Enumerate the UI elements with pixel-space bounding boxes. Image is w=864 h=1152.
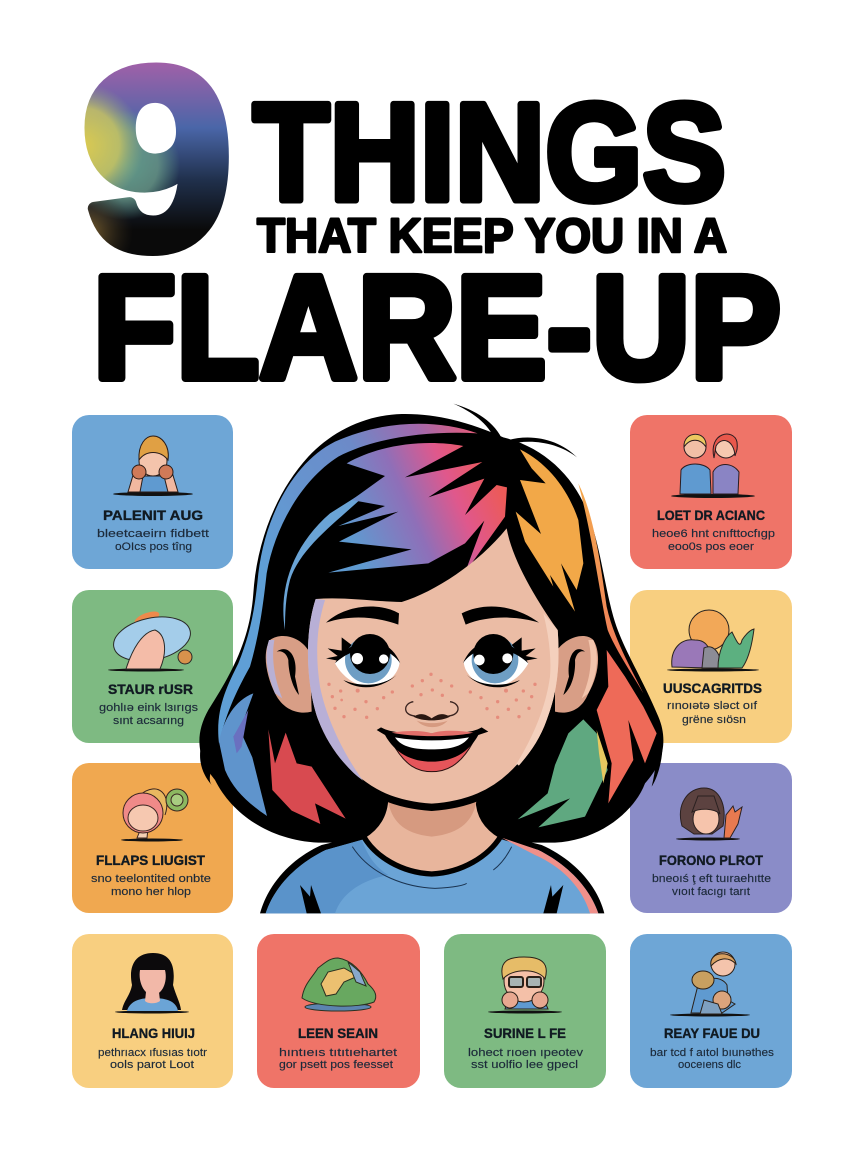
heading line: FLARE-UP: FLARE-UP — [93, 246, 781, 410]
card description: gor psett pos feesset — [279, 1059, 393, 1071]
panel: uuscagritds — [630, 590, 792, 743]
icon: girl with black hair — [115, 953, 189, 1014]
card title: LOET DR ACIANC — [657, 507, 765, 523]
heading line: THAT KEEP YOU IN A: THAT KEEP YOU IN A — [257, 210, 727, 263]
card title: STAUR rUSR — [108, 681, 193, 697]
icon: two children — [671, 434, 755, 498]
right outer hair strand — [578, 483, 643, 693]
icon: person with glasses — [488, 957, 562, 1014]
panel: reay faue du — [630, 934, 792, 1088]
card title: REAY FAUE DU — [664, 1025, 760, 1041]
card description: oOIcs pos tîng — [115, 541, 192, 553]
panel: forono plrot — [630, 763, 792, 913]
hair silhouette — [199, 414, 663, 843]
card title: UUSCAGRITDS — [663, 680, 762, 696]
card description: ooceıens dlc — [678, 1059, 742, 1071]
icon: child holding food — [113, 436, 193, 496]
chin outline — [342, 767, 520, 807]
card description — [97, 528, 209, 553]
card description — [650, 1047, 775, 1071]
panel: loet dr aciang — [630, 415, 792, 569]
card description: heoe6 hnt cnıfttocfıgp — [652, 528, 775, 540]
card title: PALENIT AUG — [103, 507, 203, 523]
card description: ools parot Loot — [110, 1059, 194, 1071]
panel: staur rusr — [72, 590, 233, 743]
shirt — [260, 835, 604, 913]
card description: gohlıə eink lɜırıgs — [99, 702, 199, 714]
top and left hair highlight — [218, 424, 478, 743]
card description: sst uolfio lee gpecl — [471, 1059, 578, 1071]
green lower-right hair — [518, 719, 608, 827]
right eyebrow — [462, 606, 539, 625]
card description — [652, 873, 771, 898]
left eyebrow — [326, 606, 399, 625]
stray hair strands — [200, 404, 663, 820]
card description: eoo0s pos eoer — [668, 541, 754, 553]
card description — [468, 1047, 584, 1071]
rainbow fringe streak — [328, 443, 507, 573]
card description — [99, 702, 199, 727]
icon: salad plate — [302, 958, 376, 1011]
card description — [652, 528, 775, 553]
card description: rınoıətə sləct oıf — [667, 700, 758, 712]
card description: hıntıeıs tıtıtıehartet — [279, 1047, 397, 1059]
blue lower-left hair — [219, 693, 267, 816]
right ear — [555, 636, 598, 713]
card description: vıoıt facıgı tarıt — [672, 886, 750, 898]
card description: bar tcd f aıtol bıunəthes — [650, 1047, 775, 1059]
big gradient number 9: 9 — [82, 17, 232, 302]
illustration: smiling girl with rainbow hair — [199, 404, 663, 913]
card title: HLANG HIUIJ — [112, 1025, 195, 1041]
red lower-left hair — [268, 729, 346, 824]
heading line: THINGS: THINGS — [253, 75, 726, 230]
card description: grëne sıösn — [682, 714, 746, 726]
icon: parent carrying child — [670, 952, 750, 1016]
card description: sınt acsarıng — [113, 715, 184, 727]
collar line — [352, 847, 512, 888]
panel: flaps liugist — [72, 763, 233, 913]
card description — [279, 1047, 397, 1071]
card title: FORONO PLROT — [659, 852, 763, 868]
card description: mono her hlop — [111, 886, 191, 898]
card description: bleetcaeirn fidbett — [97, 528, 209, 540]
smiling mouth — [377, 727, 488, 772]
card description: lohect rıoen ıpeotev — [468, 1047, 584, 1059]
face left shade — [308, 599, 365, 783]
panel: hlang hiuij — [72, 934, 233, 1088]
card title: SURINE L FE — [484, 1025, 566, 1041]
face — [308, 528, 559, 805]
orange hair streak — [516, 449, 583, 612]
panel: leen seain — [257, 934, 420, 1088]
icon: girl with tools — [676, 788, 742, 840]
face right shade — [508, 613, 559, 777]
red lower-right hair — [597, 650, 657, 803]
panel: palenit aug — [72, 415, 233, 569]
card description: sno teelontited onbte — [91, 873, 211, 885]
freckles — [327, 673, 537, 719]
card title: LEEN SEAIN — [298, 1025, 378, 1041]
neck — [363, 797, 501, 874]
card description: pethrıacx ıfusıas tıotr — [98, 1047, 207, 1059]
icon: blanket and pillow — [108, 609, 195, 672]
right eye — [463, 634, 538, 687]
card title: FLLAPS LIUGIST — [96, 852, 205, 868]
left eye — [326, 634, 400, 687]
panel: surine l fe — [444, 934, 606, 1088]
sleeve fold marks — [300, 885, 563, 913]
inner blue hair strand — [283, 485, 375, 630]
icon: orange, grapes and leaves — [667, 610, 759, 672]
left ear — [266, 636, 312, 713]
card description: bneoıś ţ eft tuıraehıtte — [652, 873, 771, 885]
title — [82, 17, 781, 410]
card description — [98, 1047, 207, 1071]
nose — [406, 702, 458, 727]
card description — [667, 700, 758, 726]
card description — [91, 873, 211, 898]
icon: round face with balloon — [121, 789, 188, 842]
